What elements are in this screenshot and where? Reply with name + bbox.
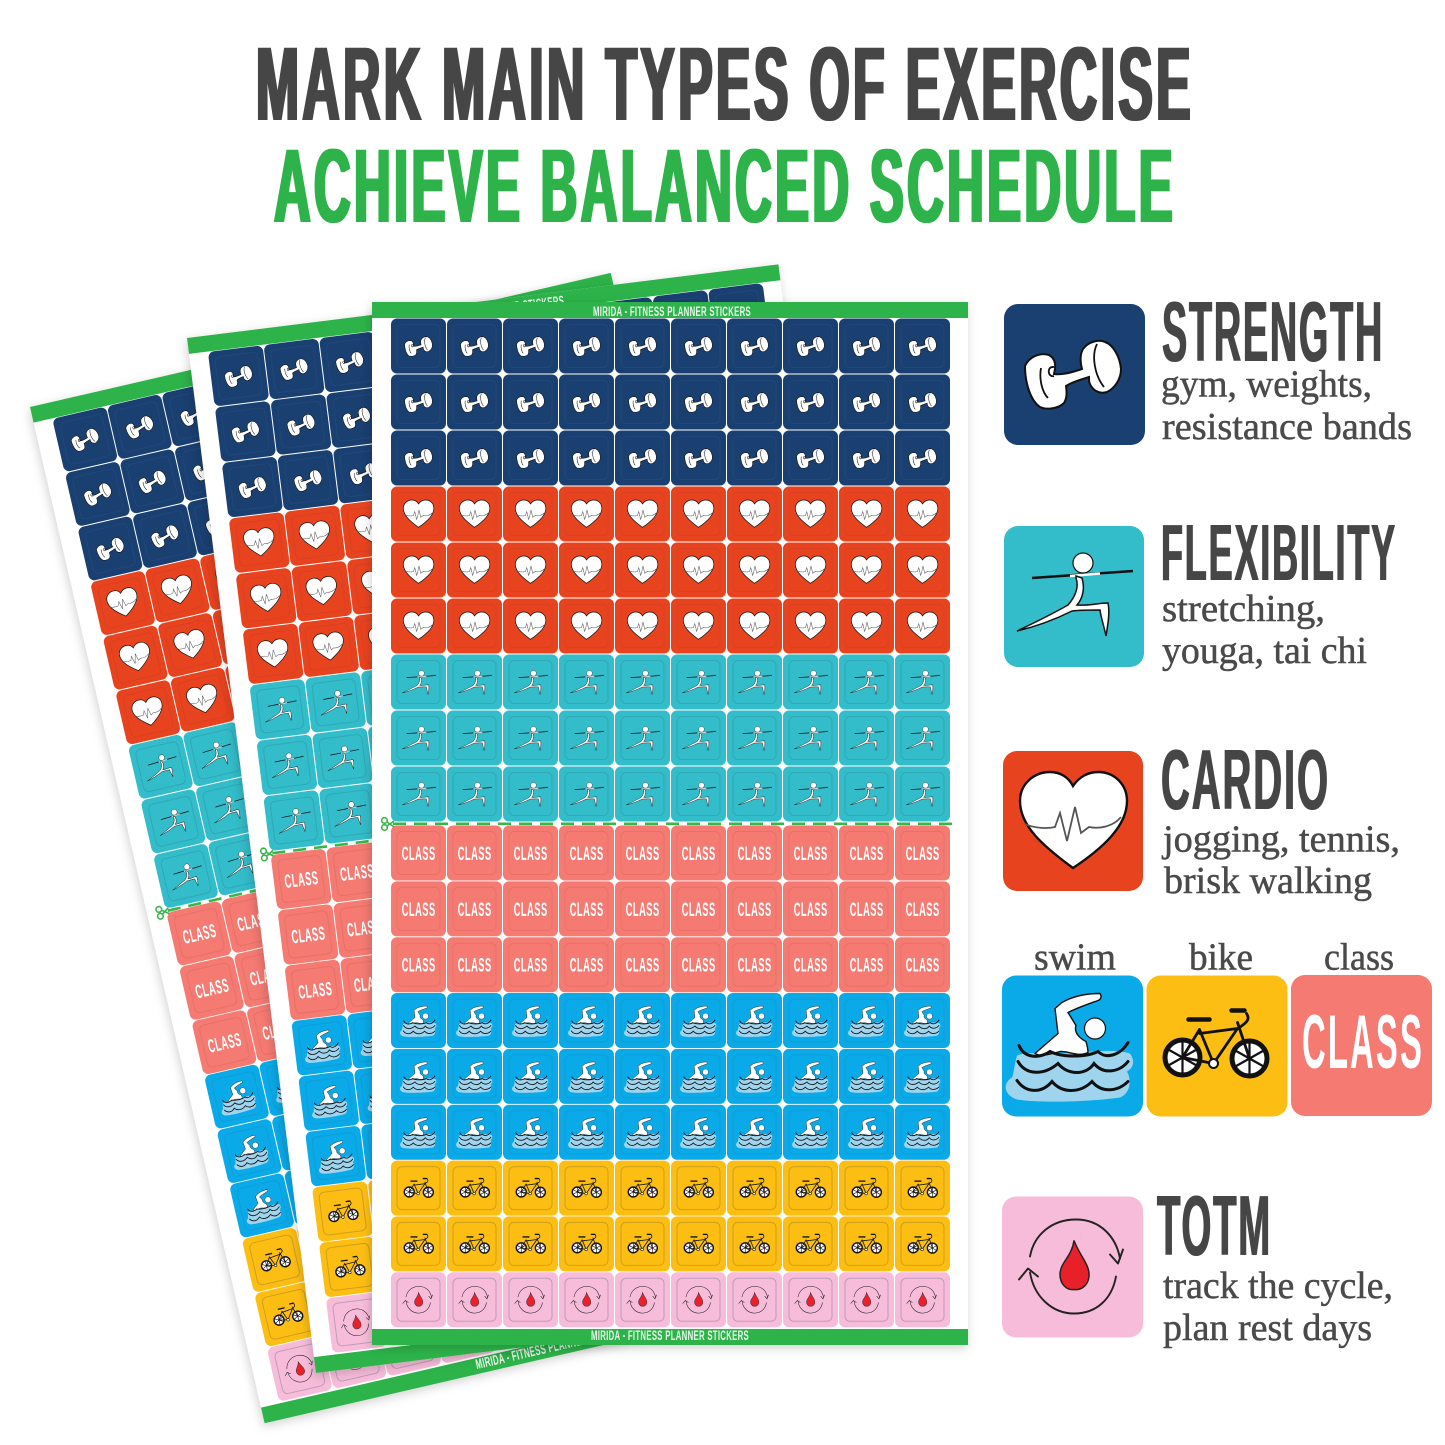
description: strength: resistance bands — [1162, 406, 1412, 448]
legend: class — [1291, 936, 1432, 1116]
description: strength: gym, weights, — [1161, 364, 1372, 406]
description: strength — [1161, 364, 1412, 448]
back sticker sheet, far left — [30, 273, 845, 1423]
label: class: class — [1324, 936, 1394, 978]
description: cardio — [1161, 818, 1400, 902]
label: swim: swim — [1034, 936, 1116, 978]
description: flexibility: stretching, — [1162, 588, 1325, 630]
description: TOTM: plan rest days — [1163, 1307, 1372, 1349]
legend: swim — [1002, 936, 1143, 1116]
icon: class badge — [1291, 975, 1432, 1116]
legend: cardio — [1003, 733, 1400, 902]
icon: dumbbell — [1004, 304, 1145, 445]
legend: flexibility — [1004, 508, 1397, 672]
legend: strength — [1004, 285, 1412, 448]
description: cardio: jogging, tennis, — [1161, 818, 1400, 860]
icon: bicycle — [1146, 976, 1288, 1116]
front sticker sheet — [372, 302, 968, 1345]
icon: heart — [1003, 751, 1143, 891]
back sticker sheet, middle — [187, 264, 907, 1373]
legend: bike — [1146, 936, 1288, 1116]
description: TOTM: track the cycle, — [1163, 1265, 1393, 1307]
label: bike: bike — [1189, 936, 1253, 978]
icon: blood drop cycle — [1002, 1196, 1143, 1338]
description: flexibility — [1162, 588, 1367, 672]
description: flexibility: youga, tai chi — [1162, 630, 1367, 672]
description: TOTM — [1163, 1265, 1393, 1349]
icon: swimmer — [1002, 976, 1143, 1116]
legend: TOTM — [1002, 1179, 1393, 1349]
title — [256, 26, 1194, 245]
description: cardio: brisk walking — [1164, 860, 1372, 902]
legend: TOTM: TOTM — [1157, 1179, 1272, 1274]
icon: yoga pose — [1004, 526, 1144, 667]
